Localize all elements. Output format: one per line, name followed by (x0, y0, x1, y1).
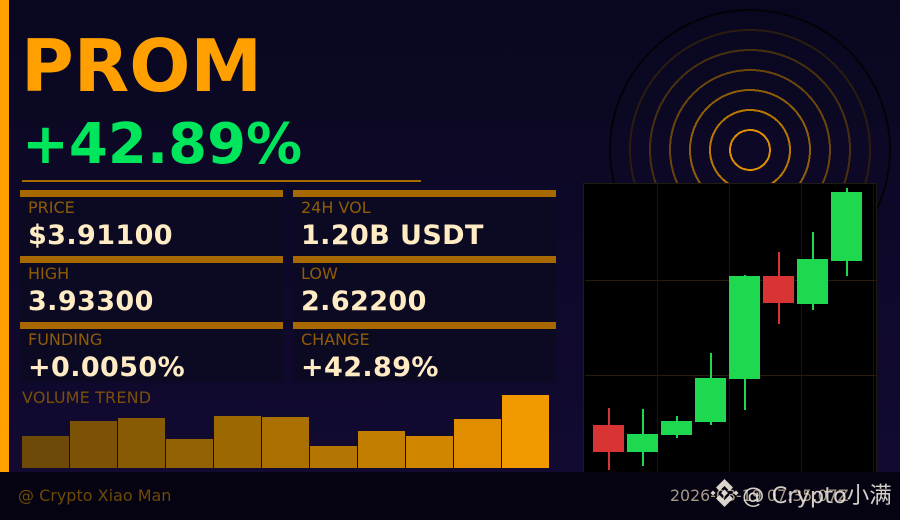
watermark icon (710, 479, 738, 507)
stat card: volume (293, 190, 556, 256)
change headline: +42.89% (22, 112, 302, 177)
stat card: volume: 1.20B USDT (301, 220, 484, 251)
candle 5 (729, 275, 760, 410)
candle 6 (763, 252, 794, 324)
stat card: price (20, 190, 283, 256)
stat card: price: PRICE (28, 198, 75, 217)
stat card: change: CHANGE (301, 330, 370, 349)
title: PROM (21, 24, 262, 108)
stat card: high (20, 256, 283, 322)
volume trend label: VOLUME TREND (22, 388, 151, 407)
stat card: funding (20, 322, 283, 383)
candle 8 (831, 188, 862, 276)
concentric rings (610, 10, 890, 290)
headline rule (22, 180, 421, 182)
volume bar chart (22, 395, 549, 468)
stat card: low (293, 256, 556, 322)
stat card: change: +42.89% (301, 352, 439, 383)
footer credit: @ Crypto Xiao Man (18, 486, 171, 505)
footer timestamp: 2026-03-19 07:35:07Z (670, 486, 849, 505)
stat card: high: HIGH (28, 264, 69, 283)
footer band (0, 472, 900, 520)
stat card: low: LOW (301, 264, 338, 283)
candle 3 (661, 416, 692, 438)
candle 2 (627, 409, 658, 466)
candle 7 (797, 232, 828, 310)
watermark text: @ Crypto小满 (742, 483, 892, 509)
candle 4 (695, 353, 726, 425)
stat card: funding: FUNDING (28, 330, 102, 349)
accent bar (0, 0, 9, 472)
candle 1 (593, 408, 624, 470)
candlestick chart (584, 184, 876, 474)
stat card: funding: +0.0050% (28, 352, 185, 383)
stat card: change (293, 322, 556, 383)
stat card: low: 2.62200 (301, 286, 427, 317)
stat card: volume: 24H VOL (301, 198, 371, 217)
stat card: price: $3.91100 (28, 220, 173, 251)
stat card: high: 3.93300 (28, 286, 154, 317)
